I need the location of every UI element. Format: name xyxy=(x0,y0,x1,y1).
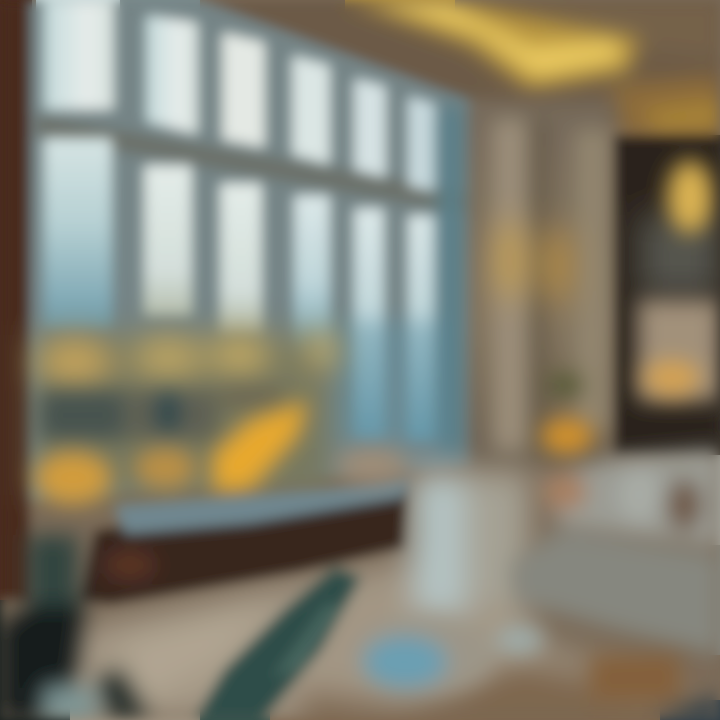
golden ornaments xyxy=(35,400,308,504)
sofa xyxy=(510,450,720,655)
window wall xyxy=(30,0,470,500)
yellow window-sill lamps xyxy=(37,332,338,386)
glass coffee table xyxy=(355,615,680,700)
ceiling xyxy=(170,0,720,140)
window panes lower row xyxy=(44,138,436,440)
dark foreground chair xyxy=(0,535,720,720)
skyline blue lower glass xyxy=(330,105,466,455)
wall sconces xyxy=(496,218,572,305)
teal chair xyxy=(195,568,360,720)
floor xyxy=(60,470,720,720)
desk xyxy=(80,447,410,605)
wall panels xyxy=(470,100,615,465)
right dark cabinet xyxy=(614,135,720,455)
window panes upper row xyxy=(44,0,436,192)
horizontal mullion xyxy=(36,115,470,215)
left wood column xyxy=(0,0,30,600)
cabinet lamp xyxy=(668,161,712,233)
window frame base xyxy=(30,0,470,500)
dark shelf objects xyxy=(40,385,282,440)
ceiling light cove xyxy=(345,0,720,130)
olive sill band xyxy=(36,335,331,495)
side table lamp xyxy=(541,373,593,454)
